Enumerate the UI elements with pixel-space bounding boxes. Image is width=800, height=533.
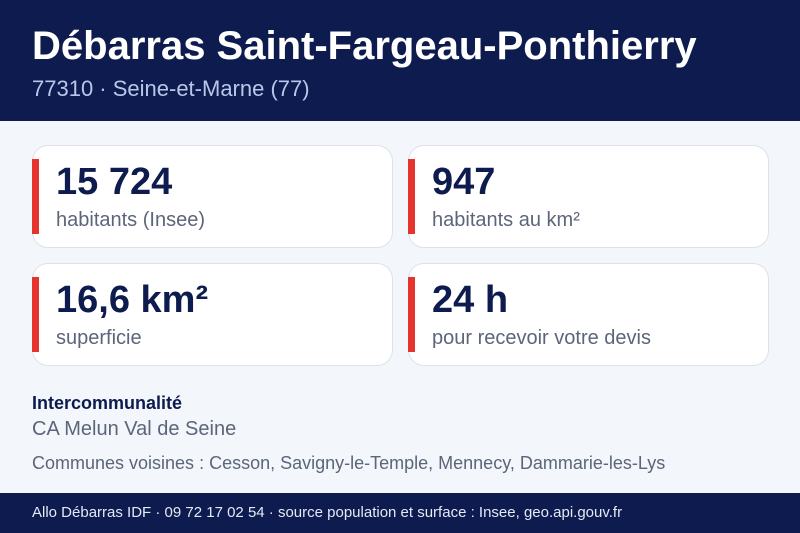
- title: Débarras Saint-Fargeau-Ponthierry: [32, 24, 697, 68]
- intercommunality name: CA Melun Val de Seine: [32, 418, 236, 440]
- delay label: pour recevoir votre devis: [432, 327, 651, 349]
- area value: 16,6 km²: [56, 279, 208, 321]
- header band: [0, 0, 800, 121]
- footer text: Allo Débarras IDF · 09 72 17 02 54 · source population et surface : Insee, geo.api.gouv.fr: [32, 504, 622, 521]
- area label: superficie: [56, 327, 142, 349]
- subtitle: 77310 · Seine-et-Marne (77): [32, 76, 310, 101]
- neighbouring communes: Communes voisines : Cesson, Savigny-le-Temple, Mennecy, Dammarie-les-Lys: [32, 453, 665, 473]
- stat card: density: [408, 145, 769, 248]
- density label: habitants au km²: [432, 209, 580, 231]
- population value: 15 724: [56, 161, 172, 203]
- stat card: area: [32, 263, 393, 366]
- population label: habitants (Insee): [56, 209, 205, 231]
- stat card: quote delay: [408, 263, 769, 366]
- intercommunality heading: Intercommunalité: [32, 393, 182, 413]
- footer band: [0, 493, 800, 533]
- stat card: population: [32, 145, 393, 248]
- density value: 947: [432, 161, 495, 203]
- delay value: 24 h: [432, 279, 508, 321]
